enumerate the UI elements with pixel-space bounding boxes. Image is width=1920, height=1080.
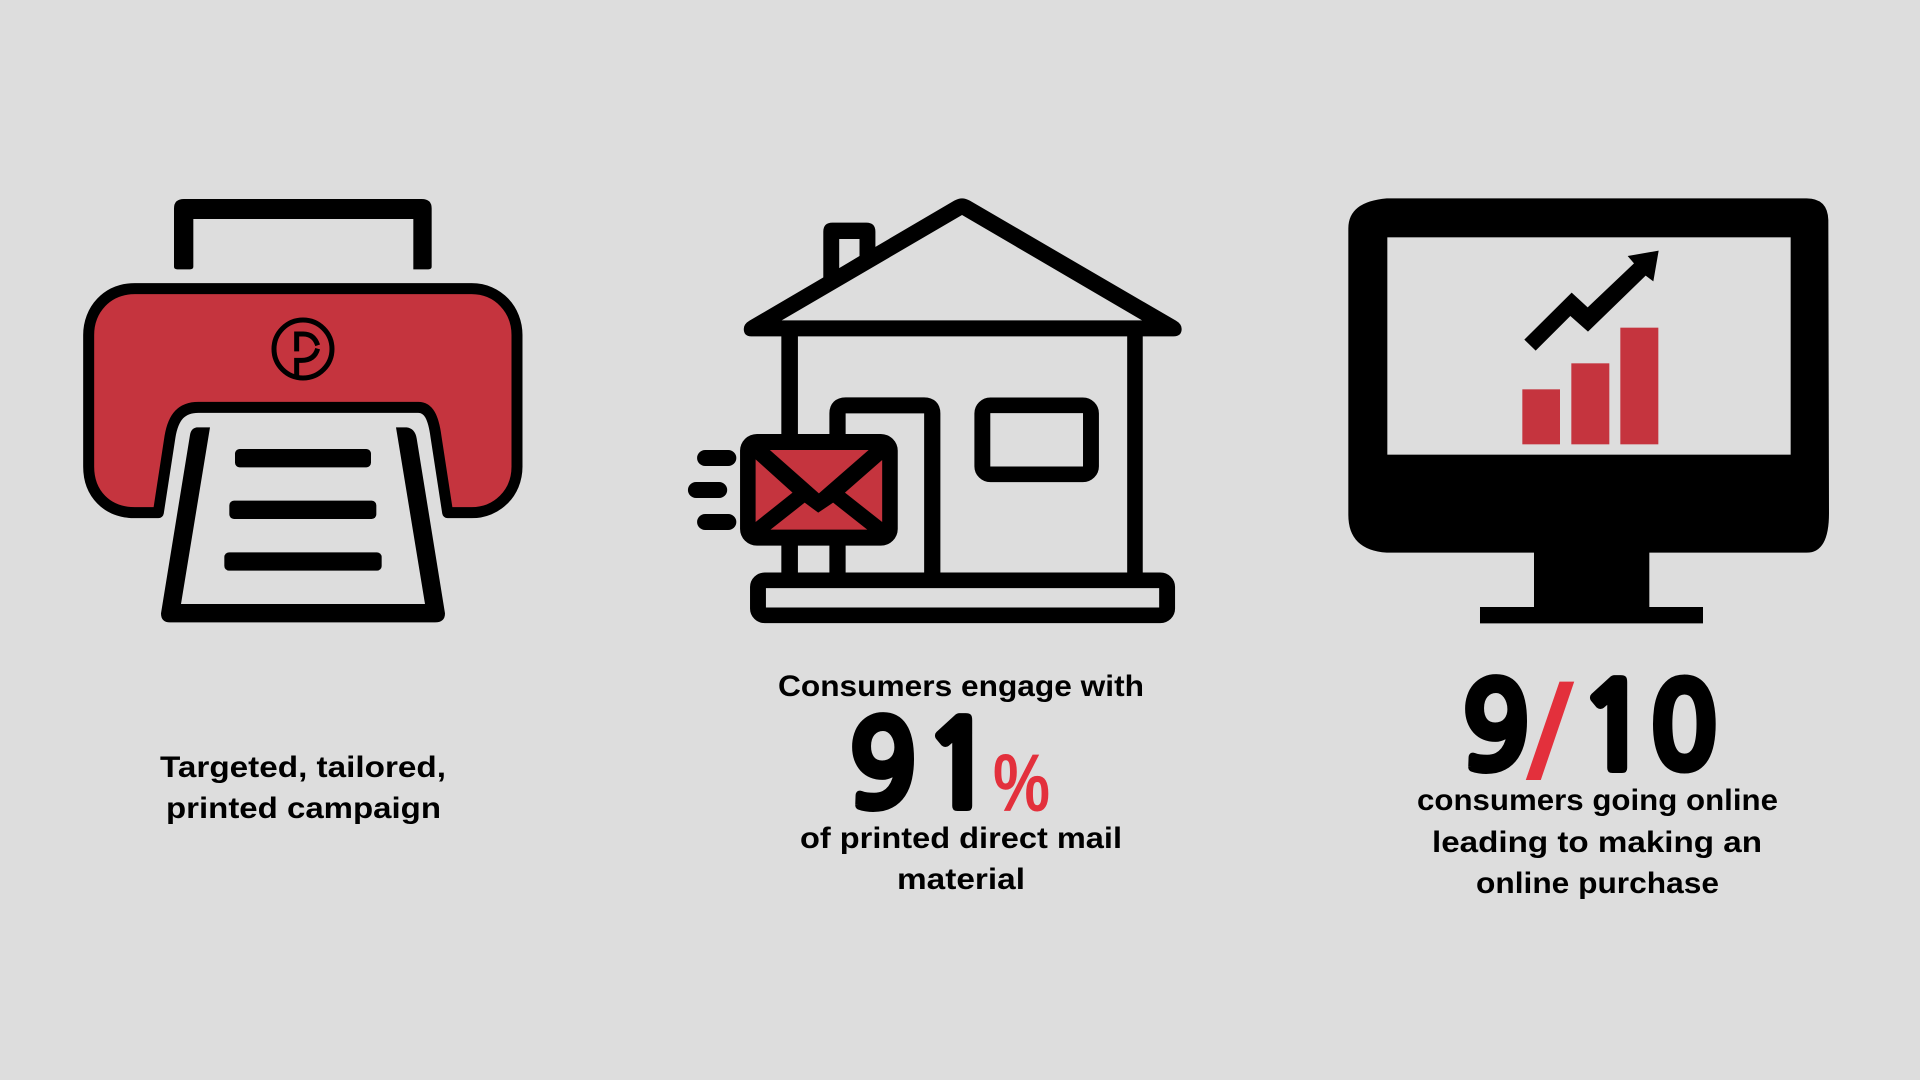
big number 10: 1 [1578,669,1651,787]
red slash: / [1527,659,1573,806]
motion lines [688,450,736,530]
big number 9: 9 [1462,669,1530,787]
printed sheet [161,427,445,622]
house walls [781,333,1143,577]
text block: targeted campaign: Targeted, tailored, [160,751,446,784]
stat: 91 percent engagement [778,670,1144,896]
stat: 91 percent engagement: material [897,863,1025,896]
big number 91: 9 [849,707,917,825]
text block: targeted campaign: printed campaign [166,792,441,825]
icon: computer monitor with growth chart [1348,198,1829,623]
printer logo [274,320,332,378]
window [982,405,1091,474]
foundation [758,580,1167,615]
roof [744,198,1182,336]
monitor frame and stand [1348,198,1829,623]
monitor screen [1387,237,1791,455]
printed sheet text lines [224,449,382,571]
text block: targeted campaign [160,751,446,825]
printer body [89,289,517,513]
stat: 9 out of 10 consumers: leading to making an [1432,826,1762,859]
envelope [740,434,898,546]
growth arrow [1524,251,1659,351]
percent sign: % [993,738,1050,829]
printer paper tray handle [174,199,432,269]
door [838,405,932,577]
icon: printer [89,199,517,622]
stat: 91 percent engagement: Consumers engage with [778,670,1144,703]
stat: 9 out of 10 consumers: online purchase [1476,867,1719,900]
icon: house with mail envelope [688,198,1182,615]
stat: 91 percent engagement: of printed direct mail [800,822,1122,855]
big number 91: 1 [923,707,996,825]
chimney [823,223,875,282]
stat: 9 out of 10 consumers [1417,659,1778,900]
stat: 9 out of 10 consumers: consumers going online [1417,784,1778,817]
big number 10 [1578,669,1718,787]
big number 91 [849,707,996,825]
big number 10: 0 [1650,669,1718,787]
bar chart [1522,328,1658,444]
